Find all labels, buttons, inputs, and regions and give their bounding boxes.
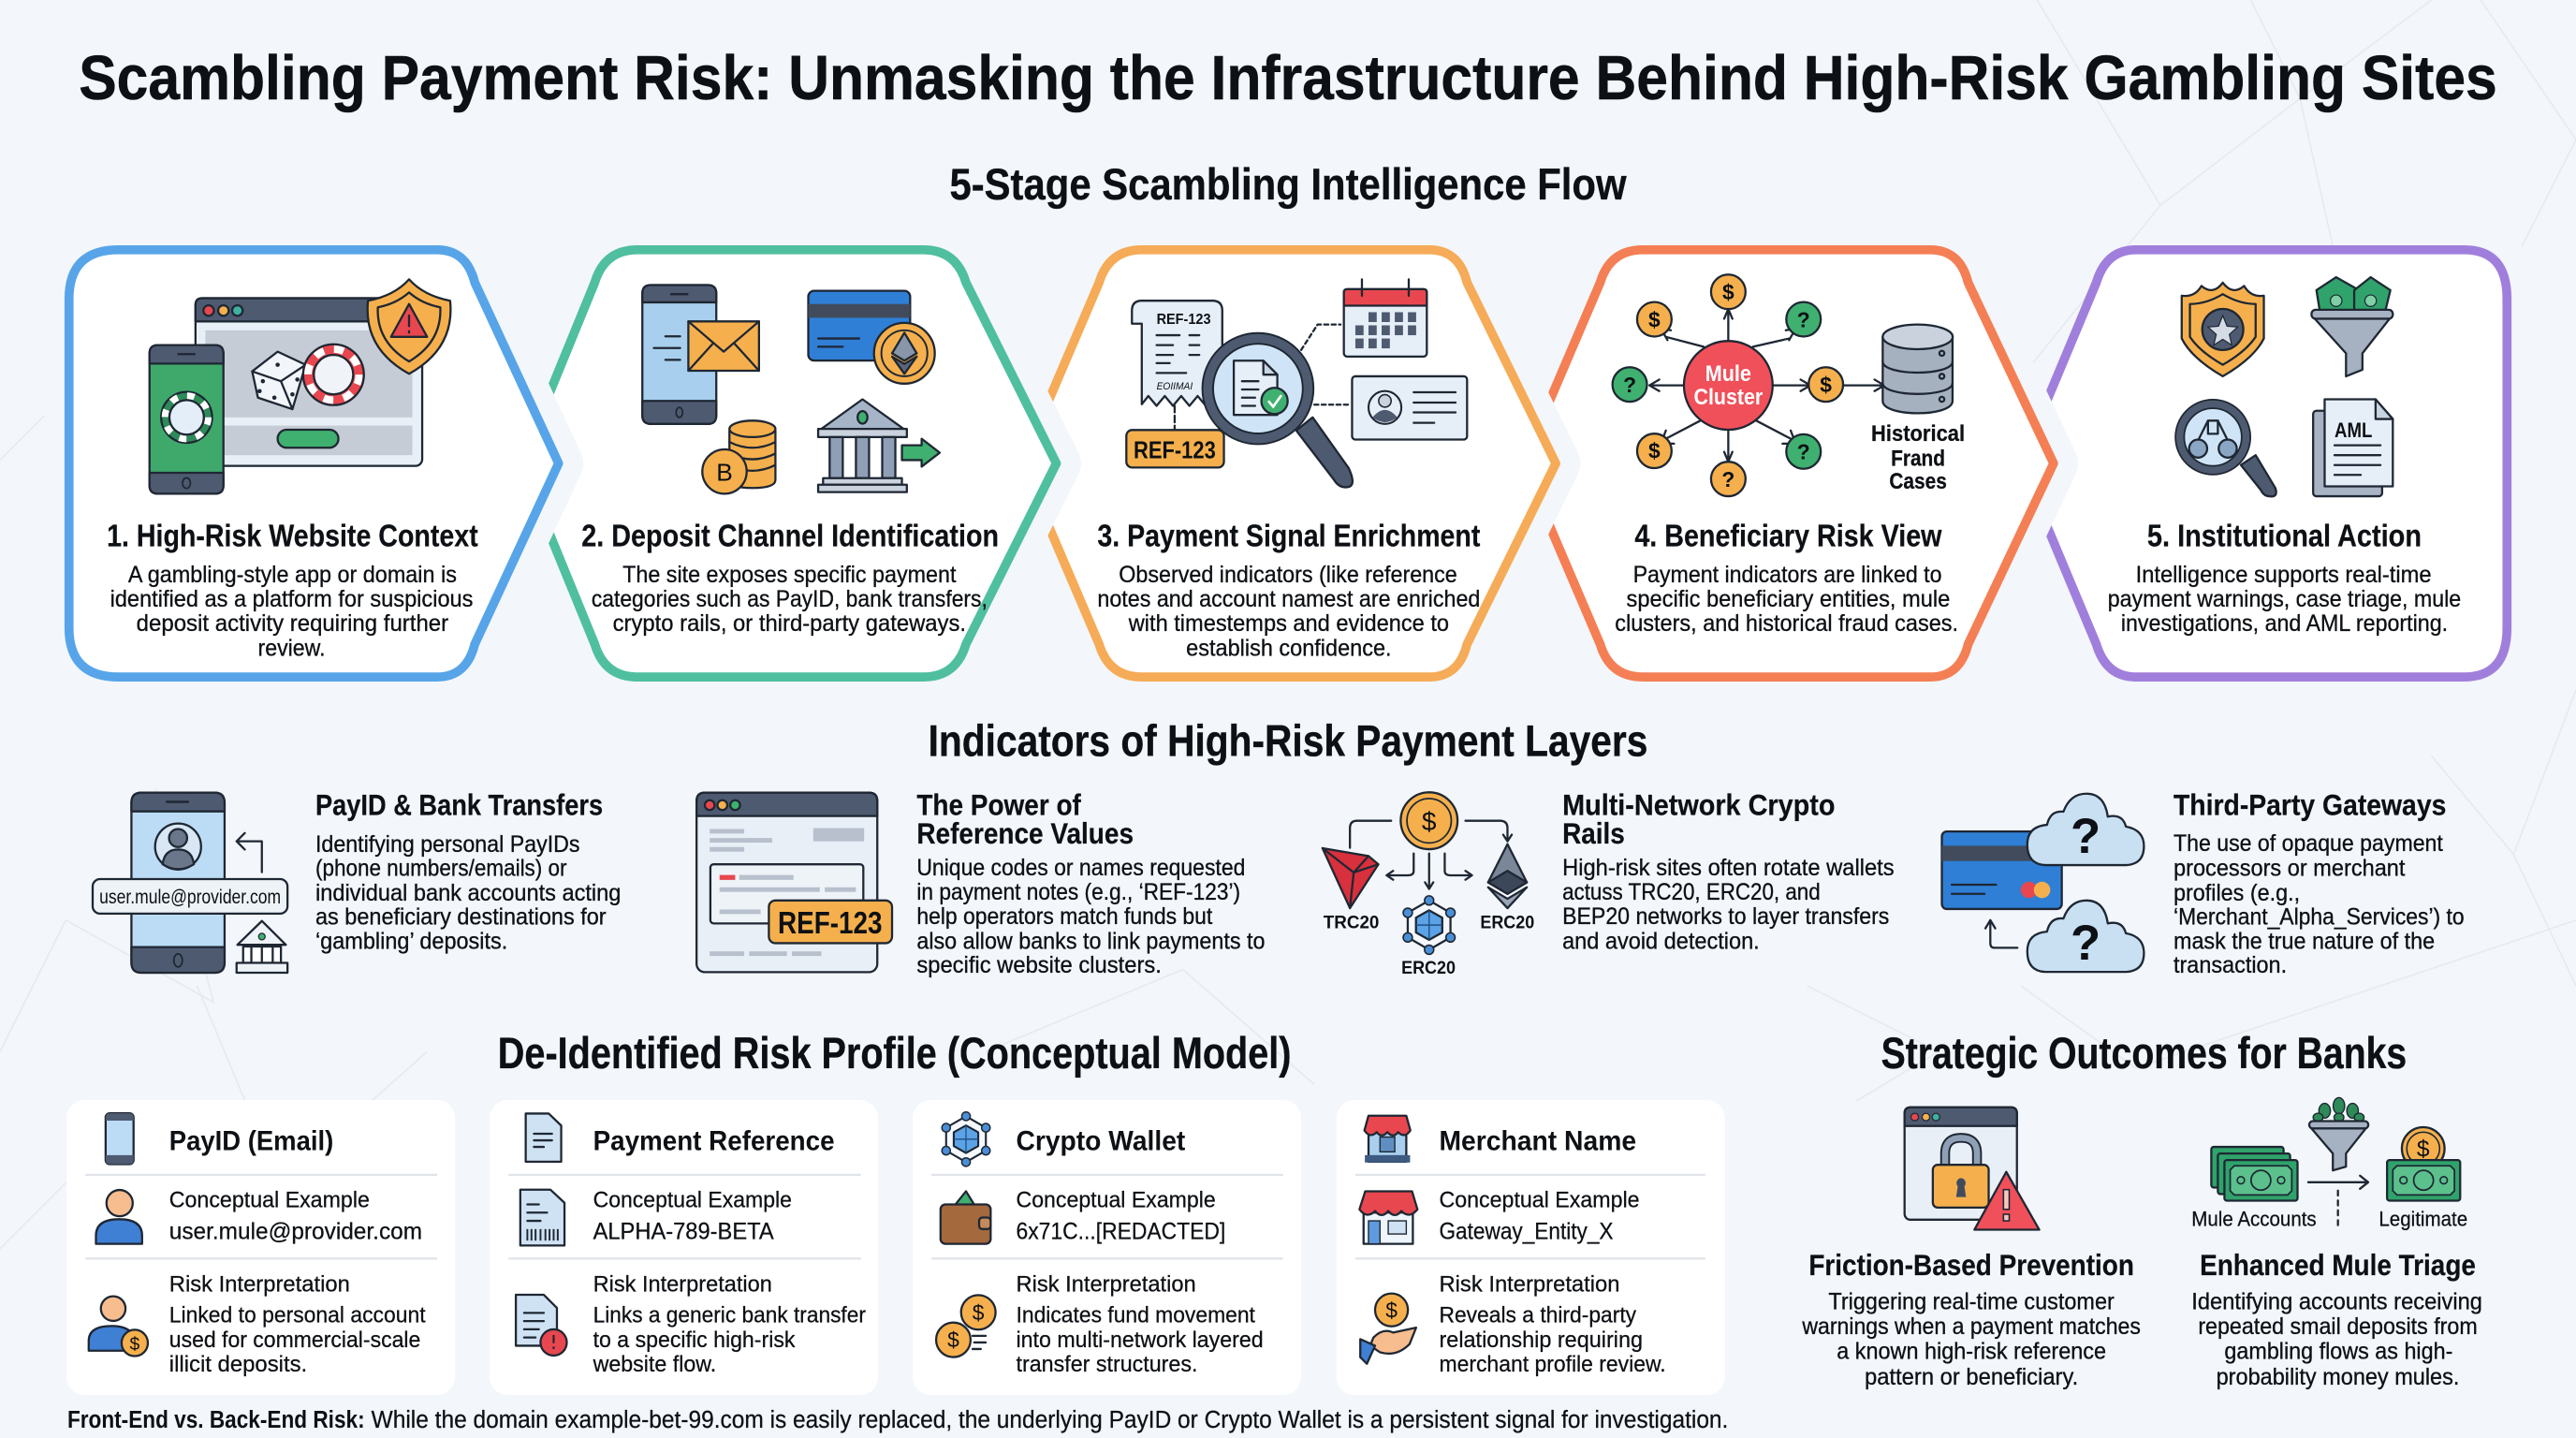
- text: conceptual example: [593, 1187, 792, 1244]
- icon: browser: [196, 299, 422, 466]
- panel: enhanced mule triage: [2191, 1097, 2482, 1390]
- text block: Unique codes or names requested: [916, 856, 1245, 881]
- text block: Triggering real-time customer: [1828, 1289, 2115, 1314]
- icon: risk nodes: ?: [1623, 373, 1636, 397]
- text: risk interpretation: [169, 1272, 426, 1377]
- text: stage 5 body: Intelligence supports real-time: [2136, 563, 2432, 588]
- text: risk interpretation: [1439, 1272, 1666, 1377]
- text: conceptual example: [1017, 1187, 1225, 1244]
- panel: stage 3 payment signal enrichment: [1022, 250, 1556, 677]
- text block: mask the true nature of the: [2174, 929, 2435, 954]
- icon: receipt: [1132, 301, 1222, 406]
- text: risk interpretation: Indicates fund movement: [1017, 1303, 1255, 1328]
- text block: Identifying personal PayIDs: [315, 832, 580, 858]
- text: risk interpretation: illicit deposits.: [169, 1352, 307, 1377]
- text block: The use of opaque payment: [2174, 831, 2443, 857]
- heading: PayID & Bank Transfers: [315, 788, 603, 822]
- text: stage 1 body: A gambling-style app or domain is: [128, 563, 457, 588]
- text block: warnings when a payment matches: [1801, 1314, 2141, 1340]
- icon: magnifier with document: [1203, 333, 1353, 487]
- text block: processors or merchant: [2174, 856, 2406, 881]
- heading: [916, 788, 1134, 850]
- heading: stage 5: 5. Institutional Action: [2147, 520, 2422, 554]
- text block: [315, 832, 621, 954]
- heading: stage 2: 2. Deposit Channel Identification: [581, 520, 999, 554]
- icon: mule cluster network: Mule: [1705, 362, 1751, 387]
- icon: bank with arrow: [818, 400, 940, 492]
- icon: person with coin: $: [130, 1335, 140, 1355]
- text: conceptual example: [1439, 1187, 1640, 1244]
- text block: help operators match funds but: [916, 904, 1212, 930]
- icon: phone with email: [642, 286, 759, 424]
- icon: card with ethereum coin: [809, 291, 935, 384]
- text: stage 3 body: with timestemps and evidence to: [1128, 611, 1449, 637]
- icon: hand with coin: [1360, 1294, 1416, 1364]
- panel: card payment reference: [490, 1100, 878, 1395]
- icon: wallet: [941, 1191, 990, 1244]
- icon: coins: [936, 1295, 996, 1357]
- icon: reference tag: REF-123: [1134, 438, 1216, 464]
- text: stage 5 body: [2108, 563, 2461, 637]
- text: risk interpretation: Reveals a third-party: [1439, 1303, 1636, 1328]
- text: conceptual example: Gateway_Entity_X: [1439, 1218, 1614, 1244]
- panel: card merchant name: [1337, 1100, 1725, 1395]
- icon: phone with email box: [93, 793, 287, 973]
- text block: Identifying accounts receiving: [2191, 1289, 2482, 1314]
- label: historical fraud cases: Cases: [1889, 469, 1947, 494]
- heading: stage 3: 3. Payment Signal Enrichment: [1097, 520, 1480, 554]
- heading: Friction-Based Prevention: [1808, 1248, 2134, 1282]
- icon: coins: $: [947, 1328, 959, 1352]
- text: conceptual example: [169, 1187, 422, 1244]
- text: risk interpretation: Risk Interpretation: [593, 1272, 772, 1298]
- text block: actuss TRC20, ERC20, and: [1562, 880, 1821, 905]
- icon: card and clouds: [1942, 794, 2144, 972]
- heading: Rails: [1562, 816, 1625, 850]
- text block: ‘Merchant_Alpha_Services’) to: [2174, 905, 2465, 931]
- text block: pattern or beneficiary.: [1865, 1365, 2078, 1390]
- icon: phone: [106, 1113, 134, 1165]
- icon: browser lock warning: [1905, 1108, 2040, 1230]
- panel: stage 1 high-risk website context: [69, 250, 559, 677]
- text: risk interpretation: Risk Interpretation: [1017, 1272, 1196, 1298]
- panel: multi-network crypto rails: [1323, 788, 1895, 978]
- text: stage 3 body: notes and account namest are enriched: [1097, 587, 1480, 612]
- heading: PayID (Email): [169, 1126, 333, 1157]
- heading: Third-Party Gateways: [2174, 788, 2446, 822]
- heading: stage 4: 4. Beneficiary Risk View: [1634, 520, 1942, 554]
- text block: [1562, 856, 1895, 954]
- text: conceptual example: user.mule@provider.com: [169, 1218, 422, 1244]
- text block: [916, 856, 1265, 978]
- text: risk interpretation: [593, 1272, 866, 1377]
- text: conceptual example: Conceptual Example: [1439, 1187, 1640, 1212]
- text block: [2191, 1289, 2482, 1390]
- text block: also allow banks to link payments to: [916, 929, 1265, 954]
- heading: Multi-Network Crypto: [1562, 788, 1835, 822]
- text: risk interpretation: merchant profile review.: [1439, 1352, 1666, 1377]
- icon: browser with reference tag: [696, 793, 892, 972]
- panel: stage 5 institutional action: [2021, 250, 2507, 677]
- icon: crypto networks: ERC20: [1480, 914, 1534, 933]
- text: risk interpretation: relationship requiring: [1439, 1328, 1643, 1353]
- icon: id card: [1352, 376, 1467, 440]
- heading: Merchant Name: [1439, 1126, 1636, 1157]
- text: stage 1 body: [110, 563, 473, 661]
- text: stage 5 body: investigations, and AML reporting.: [2121, 611, 2448, 637]
- panel: third-party gateways: [1942, 788, 2465, 978]
- text: stage 3 body: Observed indicators (like reference: [1119, 563, 1457, 588]
- text block: High-risk sites often rotate wallets: [1562, 856, 1895, 881]
- icon: dice: [252, 352, 305, 409]
- label: legitimate: Legitimate: [2378, 1207, 2467, 1230]
- text block: ‘gambling’ deposits.: [315, 929, 507, 954]
- icon: calendar: [1344, 279, 1427, 357]
- text block: [1801, 1289, 2141, 1390]
- icon: funnel with cash: [2311, 277, 2393, 376]
- heading: 5-stage flow: 5-Stage Scambling Intelligence Flow: [949, 160, 1627, 210]
- text: stage 4 body: Payment indicators are linked to: [1633, 563, 1942, 588]
- heading: Enhanced Mule Triage: [2200, 1248, 2476, 1282]
- text: stage 2 body: categories such as PayID, bank transfers,: [592, 587, 988, 612]
- heading: Reference Values: [916, 816, 1134, 850]
- icon: AML document: [2313, 400, 2393, 496]
- icon: document: [526, 1113, 562, 1162]
- icon: crypto networks: TRC20: [1324, 914, 1379, 933]
- text: risk interpretation: Linked to personal account: [169, 1303, 426, 1328]
- panel: payid and bank transfers: [93, 788, 621, 973]
- heading: Payment Reference: [593, 1126, 835, 1157]
- text block: as beneficiary destinations for: [315, 905, 607, 931]
- heading: The Power of: [916, 788, 1081, 822]
- text: stage 1 body: deposit activity requiring further: [137, 611, 448, 637]
- icon: crypto networks: [1323, 792, 1534, 978]
- icon: cash funnel triage: [2211, 1097, 2460, 1226]
- text block: [2174, 831, 2465, 978]
- text: conceptual example: Conceptual Example: [1017, 1187, 1216, 1212]
- text: stage 1 body: identified as a platform for suspicious: [110, 587, 473, 612]
- text: conceptual example: Conceptual Example: [169, 1187, 370, 1212]
- text: conceptual example: 6x71C...[REDACTED]: [1017, 1218, 1225, 1244]
- heading: indicators: Indicators of High-Risk Payment Layers: [929, 716, 1647, 766]
- icon: bitcoin stack: [702, 420, 775, 493]
- text: stage 2 body: The site exposes specific payment: [622, 563, 957, 588]
- text block: gambling flows as high-: [2224, 1339, 2452, 1364]
- icon: risk nodes: $: [1648, 439, 1661, 463]
- text block: a known high-risk reference: [1837, 1339, 2106, 1364]
- text: risk interpretation: used for commercial-scale: [169, 1328, 420, 1353]
- icon: cash funnel triage: $: [2417, 1137, 2430, 1163]
- icon: barcode document: [520, 1190, 564, 1245]
- icon: mule cluster network: [1613, 274, 1965, 496]
- icon: crypto networks: $: [1422, 807, 1437, 836]
- icon: risk nodes: $: [1820, 373, 1832, 397]
- icon: risk nodes: $: [1722, 280, 1734, 304]
- heading: [1562, 788, 1835, 850]
- label: mule accounts: Mule Accounts: [2191, 1207, 2317, 1230]
- text: conceptual example: Conceptual Example: [593, 1187, 792, 1212]
- text: stage 2 body: [592, 563, 988, 637]
- icon: store: [1365, 1116, 1411, 1163]
- footer note: Front-End vs. Back-End Risk:: [67, 1405, 365, 1433]
- text block: specific website clusters.: [916, 953, 1162, 978]
- icon: card and clouds: ?: [2071, 809, 2100, 864]
- icon: browser with reference tag: REF-123: [778, 906, 882, 941]
- icon: receipt: EOIIMAI: [1157, 381, 1193, 392]
- icon: mule cluster network: Cluster: [1694, 386, 1763, 410]
- text: risk interpretation: to a specific high-risk: [593, 1328, 796, 1353]
- heading: stage 1: 1. High-Risk Website Context: [107, 520, 478, 554]
- icon: database: [1882, 325, 1953, 413]
- text: stage 5 body: payment warnings, case triage, mule: [2108, 587, 2461, 612]
- icon: risk nodes: ?: [1721, 467, 1734, 492]
- text: stage 2 body: crypto rails, or third-party gateways.: [613, 611, 966, 637]
- text block: (phone numbers/emails) or: [315, 856, 567, 881]
- icon: card and clouds: ?: [2071, 916, 2100, 971]
- text: stage 1 body: review.: [258, 636, 326, 661]
- icon: risk nodes: ?: [1797, 440, 1810, 464]
- panel: reference values: [696, 788, 1265, 978]
- text block: transaction.: [2174, 953, 2287, 978]
- label: historical fraud cases: Frand: [1891, 447, 1945, 472]
- label: historical fraud cases: Historical: [1871, 421, 1965, 447]
- icon: risk nodes: ?: [1797, 307, 1810, 331]
- icon: crypto networks: ERC20: [1401, 959, 1456, 978]
- icon: risk nodes: $: [1648, 307, 1661, 331]
- text block: individual bank accounts acting: [315, 881, 621, 906]
- text: stage 3 body: [1097, 563, 1480, 661]
- icon: document alert: [516, 1295, 567, 1356]
- text: risk interpretation: Risk Interpretation: [1439, 1272, 1620, 1298]
- icon: magnifier binoculars: [2175, 400, 2276, 496]
- footer note: While the domain example-bet-99.com is easily replaced, the underlying PayID or Crypto Wallet is a persistent signal for investigation.: [372, 1405, 1728, 1433]
- panel: friction-based prevention: [1801, 1108, 2141, 1390]
- text: stage 4 body: clusters, and historical fraud cases.: [1615, 611, 1958, 637]
- icon: coins: $: [973, 1300, 985, 1325]
- icon: network: [942, 1112, 990, 1167]
- text: risk interpretation: Risk Interpretation: [169, 1272, 350, 1298]
- icon: phone with email box: user.mule@provider.com: [99, 887, 281, 908]
- icon: receipt: REF-123: [1157, 312, 1211, 328]
- text: risk interpretation: [1017, 1272, 1264, 1377]
- icon: risk nodes: [1613, 274, 1843, 496]
- icon: person: [95, 1190, 142, 1244]
- icon: hand with coin: $: [1385, 1299, 1398, 1323]
- panel: stage 2 deposit channel identification: [520, 250, 1057, 677]
- label: historical fraud cases: [1871, 421, 1965, 494]
- text: stage 3 body: establish confidence.: [1186, 636, 1392, 661]
- icon: AML document: AML: [2334, 418, 2372, 442]
- icon: red chip: [303, 345, 364, 405]
- heading: Crypto Wallet: [1017, 1126, 1185, 1157]
- icon: badge: [2182, 283, 2264, 376]
- icon: phone with chip: [150, 345, 224, 493]
- text: stage 4 body: specific beneficiary entities, mule: [1627, 587, 1950, 612]
- text: risk interpretation: transfer structures.: [1017, 1352, 1197, 1377]
- text block: repeated smail deposits from: [2198, 1314, 2478, 1340]
- panel: card crypto wallet: [913, 1100, 1301, 1395]
- icon: reference tag: [1126, 430, 1224, 467]
- text block: and avoid detection.: [1562, 929, 1760, 954]
- panel: card payid email: [66, 1100, 455, 1395]
- text: risk interpretation: Links a generic bank transfer: [593, 1303, 866, 1328]
- text: stage 4 body: [1615, 563, 1958, 637]
- text: risk interpretation: into multi-network layered: [1017, 1328, 1264, 1353]
- icon: person with coin: [89, 1297, 148, 1356]
- text: conceptual example: ALPHA-789-BETA: [593, 1218, 774, 1244]
- heading: strategic outcomes: Strategic Outcomes for Banks: [1881, 1029, 2407, 1078]
- text block: probability money mules.: [2217, 1365, 2459, 1390]
- text: risk interpretation: website flow.: [593, 1352, 716, 1377]
- heading: de-identified risk profile: De-Identified Risk Profile (Conceptual Model): [498, 1029, 1292, 1078]
- text block: profiles (e.g.,: [2174, 881, 2300, 906]
- icon: bitcoin stack: B: [716, 458, 733, 486]
- panel: stage 4 beneficiary risk view: [1523, 250, 2054, 677]
- icon: storefront: [1359, 1191, 1417, 1244]
- icon: warning shield: [368, 279, 450, 374]
- text block: in payment notes (e.g., ‘REF-123’): [916, 880, 1240, 905]
- text block: BEP20 networks to layer transfers: [1562, 904, 1889, 930]
